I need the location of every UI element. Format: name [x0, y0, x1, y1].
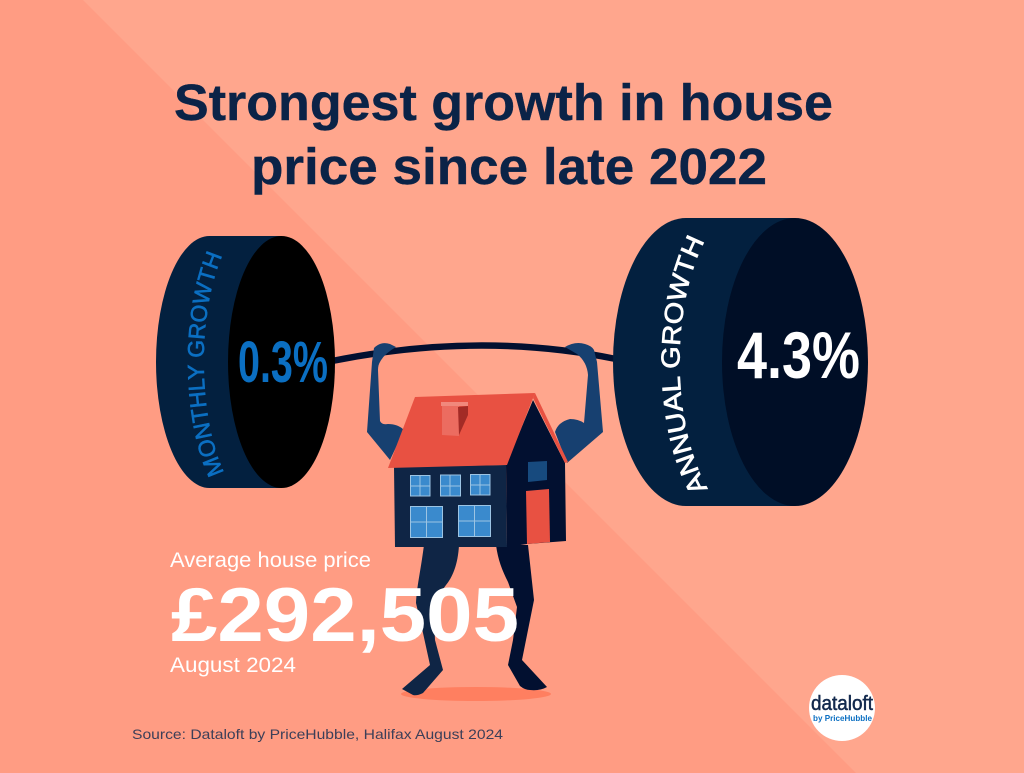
average house price	[170, 549, 519, 677]
value: 4.3%: 4.3%	[737, 318, 860, 392]
average house price: August 2024	[170, 654, 296, 677]
windows	[410, 474, 490, 538]
label: monthly growth: MONTHLY GROWTH	[188, 251, 224, 478]
front wall	[394, 465, 507, 547]
door	[526, 489, 550, 544]
average house price: Average house price	[170, 549, 371, 572]
weight: annual growth	[613, 218, 868, 506]
roof edge	[533, 393, 568, 463]
weight: monthly growth	[156, 236, 335, 488]
barbell bar	[332, 345, 616, 361]
shadow under house	[401, 687, 551, 701]
label: annual growth: ANNUAL GROWTH	[661, 234, 708, 490]
chimney	[441, 402, 468, 436]
house legs	[402, 545, 547, 695]
house arms	[367, 343, 603, 463]
logo: dataloft	[811, 693, 873, 715]
value: 0.3%: 0.3%	[238, 330, 328, 395]
average house price: £292,505	[171, 573, 519, 658]
side window	[528, 461, 547, 482]
logo: by PriceHubble	[813, 713, 872, 723]
title: price since late 2022	[251, 138, 767, 195]
title: Strongest growth in house	[174, 74, 833, 131]
house	[388, 393, 568, 547]
logo	[809, 675, 875, 741]
roof	[388, 393, 535, 468]
side wall	[506, 400, 566, 547]
source: Source: Dataloft by PriceHubble, Halifax August 2024	[132, 726, 503, 742]
title	[174, 74, 833, 195]
